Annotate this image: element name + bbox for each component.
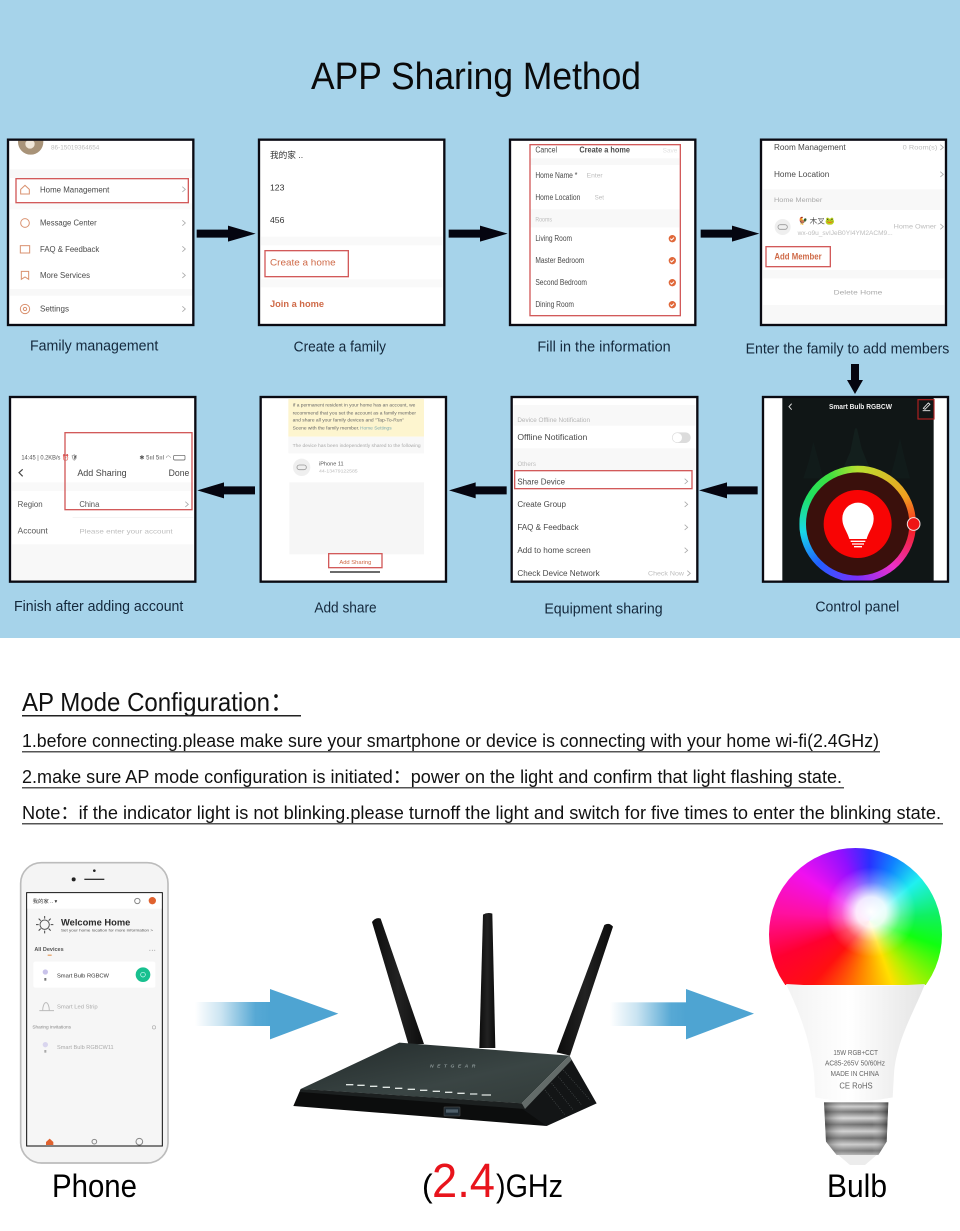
panel: fill in the information: Master Bedroom	[535, 256, 585, 265]
panel: add sharing account: Please enter your account	[79, 529, 173, 536]
bulb body with markings: 15W RGB+CCT	[833, 1050, 879, 1057]
icon: sun	[36, 916, 53, 933]
panel: add share: Scene with the family member.	[293, 425, 359, 430]
panel: add members: Delete Home	[834, 289, 883, 296]
panel: equipment sharing: Add to home screen	[517, 546, 591, 555]
panel: equipment sharing: Check Device Network	[517, 569, 600, 578]
caption: equipment sharing: Equipment sharing	[544, 601, 663, 617]
panel: create a family	[259, 140, 444, 325]
arrow: equipment sharing to add share	[449, 482, 507, 498]
section: AP mode configuration text	[22, 687, 943, 824]
panel: add members: Home Member	[774, 197, 823, 204]
panel: add sharing account: 14:45 | 0.2KB/s ⏰ 🛡	[21, 454, 78, 462]
panel: add members: Room Management	[774, 143, 846, 152]
panel: family management: More Services	[40, 271, 90, 280]
panel: add members: Home Location	[774, 170, 829, 179]
bulb screw base	[824, 1102, 888, 1165]
panel: equipment sharing: Others	[517, 461, 537, 468]
panel: control panel: Smart Bulb RGBCW	[829, 404, 892, 411]
panel: equipment sharing	[512, 397, 697, 582]
panel: add share: Home Settings	[360, 425, 392, 430]
title: APP Sharing Method	[311, 56, 641, 98]
panel: add share: 44-13479122585	[319, 469, 358, 474]
panel: add sharing account: Account	[18, 526, 48, 536]
panel: add share: and share all your family devices and "Tap-To-Run"	[293, 418, 404, 423]
panel: fill in the information: Cancel	[535, 145, 557, 154]
illustration: phone: Smart Bulb RGBCW11	[57, 1045, 114, 1051]
bulb body with markings: CE RoHS	[839, 1081, 873, 1090]
illustration: phone: Smart Led Strip	[57, 1004, 98, 1010]
panel: create a family: Create a home	[270, 257, 336, 267]
panel: create a family: 123	[270, 182, 285, 192]
caption: control panel: Control panel	[815, 599, 899, 615]
panel: add share: iPhone 11	[319, 462, 344, 468]
panel: add sharing account: Region	[18, 499, 43, 509]
row one, right side	[449, 140, 949, 357]
label: bulb: Bulb	[827, 1168, 887, 1204]
illustration: phone: ...	[149, 947, 156, 953]
panel: fill in the information: Home Name *	[535, 171, 577, 180]
panel: add share	[261, 397, 446, 582]
panel: fill in the information: Set	[595, 195, 604, 202]
label: frequency 2.4 GHz: )GHz	[496, 1168, 563, 1204]
panel: control panel	[763, 397, 948, 582]
panel: equipment sharing: Create Group	[517, 500, 567, 509]
illustration: phone: Welcome Home	[61, 917, 130, 927]
arrow: down to control panel	[847, 364, 863, 394]
row one of app screens	[8, 129, 444, 356]
caption: create a family: Create a family	[294, 340, 387, 356]
panel: family management: Settings	[40, 305, 69, 314]
illustration: phone: 我的家 .. ▾	[33, 897, 58, 905]
row two, left side	[10, 397, 446, 616]
illustration: phone: Smart Bulb RGBCW	[57, 974, 110, 980]
caption: family management: Family management	[30, 339, 158, 355]
caption: fill in the information: Fill in the information	[537, 340, 671, 356]
panel: equipment sharing: Device Offline Notification	[517, 417, 590, 424]
heading: AP mode configuration: AP Mode Configuration：	[22, 687, 294, 717]
arrow: control panel to equipment sharing	[699, 482, 758, 498]
panel: add members: Add Member	[774, 252, 822, 262]
label: frequency 2.4 GHz: (	[422, 1168, 433, 1204]
panel: fill in the information: Living Room	[535, 234, 572, 243]
panel: add share: Add Sharing	[339, 560, 371, 566]
panel: fill in the information	[510, 140, 695, 325]
panel: fill in the information: Enter	[587, 173, 603, 180]
panel: add share: The device has been independently shared to the following	[293, 443, 421, 448]
arrow: step one to two	[197, 226, 256, 242]
panel: fill in the information: Second Bedroom	[535, 278, 587, 287]
illustration: router: NETGEAR	[430, 1064, 476, 1070]
illustration: phone: Sharing invitations	[32, 1025, 71, 1030]
panel: create a family: Join a home	[270, 299, 324, 309]
illustration: phone: All Devices	[34, 947, 64, 953]
arrow: step two to three	[449, 226, 508, 242]
panel: family management	[8, 129, 193, 325]
panel: equipment sharing: Check Now	[648, 571, 684, 578]
arrow: router to bulb	[610, 989, 754, 1039]
panel: equipment sharing: Share Device	[517, 477, 566, 486]
panel: add sharing account	[10, 397, 195, 582]
caption: add share: Add share	[314, 600, 377, 616]
panel: create a family: 456	[270, 215, 285, 225]
caption: add members: Enter the family to add members	[746, 341, 949, 357]
illustration: phone	[21, 863, 168, 1163]
panel: equipment sharing: Offline Notification	[517, 433, 587, 442]
panel: add sharing account: Add Sharing	[77, 468, 127, 478]
panel: add members	[761, 140, 946, 325]
panel: family management: Message Center	[40, 219, 97, 228]
row two, right side	[449, 397, 948, 617]
label: phone: Phone	[52, 1168, 137, 1204]
panel: add share: recommend that you set the account as a family member	[293, 410, 416, 415]
arrow: add share to finish	[197, 482, 255, 498]
panel: fill in the information: Create a home	[579, 145, 631, 154]
panel: fill in the information: Home Location	[535, 193, 580, 202]
panel: family management: FAQ & Feedback	[40, 245, 99, 254]
panel: add sharing account: China	[79, 499, 100, 509]
panel: add sharing account: ✱ 5ııl 5ııl ◠	[139, 455, 171, 462]
bulb body with markings	[786, 984, 925, 1101]
illustration: router	[293, 913, 613, 1126]
instruction note: Note：if the indicator light is not blinking.please turnoff the light and switch for five times to enter the blinking state.	[22, 802, 941, 823]
panel: fill in the information: Dining Room	[535, 300, 574, 309]
panel: add members: wx-o9u_svIJeB0YI4YM2ACM9...	[797, 230, 893, 237]
caption: finish after adding account: Finish after adding account	[14, 599, 183, 615]
panel: add members: Home Owner	[894, 224, 937, 231]
panel: fill in the information: Save	[663, 147, 678, 154]
panel: family management: Home Management	[40, 185, 110, 194]
illustration: phone: Set your home location for more information >	[61, 929, 153, 933]
bulb globe	[769, 848, 942, 985]
arrow: phone to router	[195, 989, 338, 1039]
instruction line 1: 1.before connecting.please make sure your smartphone or device is connecting with your home wi-fi(2.4GHz)	[22, 730, 879, 751]
panel: create a family: 我的家 ..	[270, 149, 303, 160]
panel: equipment sharing: FAQ & Feedback	[517, 523, 579, 532]
bulb body with markings: MADE IN CHINA	[831, 1071, 879, 1078]
panel: fill in the information: Rooms	[535, 216, 553, 223]
instruction line 2: 2.make sure AP mode configuration is initiated：power on the light and confirm that light flashing state.	[22, 766, 842, 787]
illustration: RGB bulb	[769, 848, 942, 1165]
panel: add sharing account: Done	[169, 468, 189, 478]
label: frequency 2.4 GHz	[422, 1155, 563, 1208]
panel: add members: 0 Room(s)	[903, 145, 937, 152]
panel: add share: If a permanent resident in your home has an account, we	[293, 403, 416, 408]
panel: add members: 🐓 木叉🐸	[798, 216, 835, 226]
label: frequency 2.4 GHz: 2.4	[432, 1155, 495, 1208]
bulb body with markings: AC85-265V 50/60Hz	[825, 1061, 885, 1068]
panel: family management: 86-15019364654	[51, 145, 100, 152]
arrow: step three to four	[701, 226, 759, 242]
